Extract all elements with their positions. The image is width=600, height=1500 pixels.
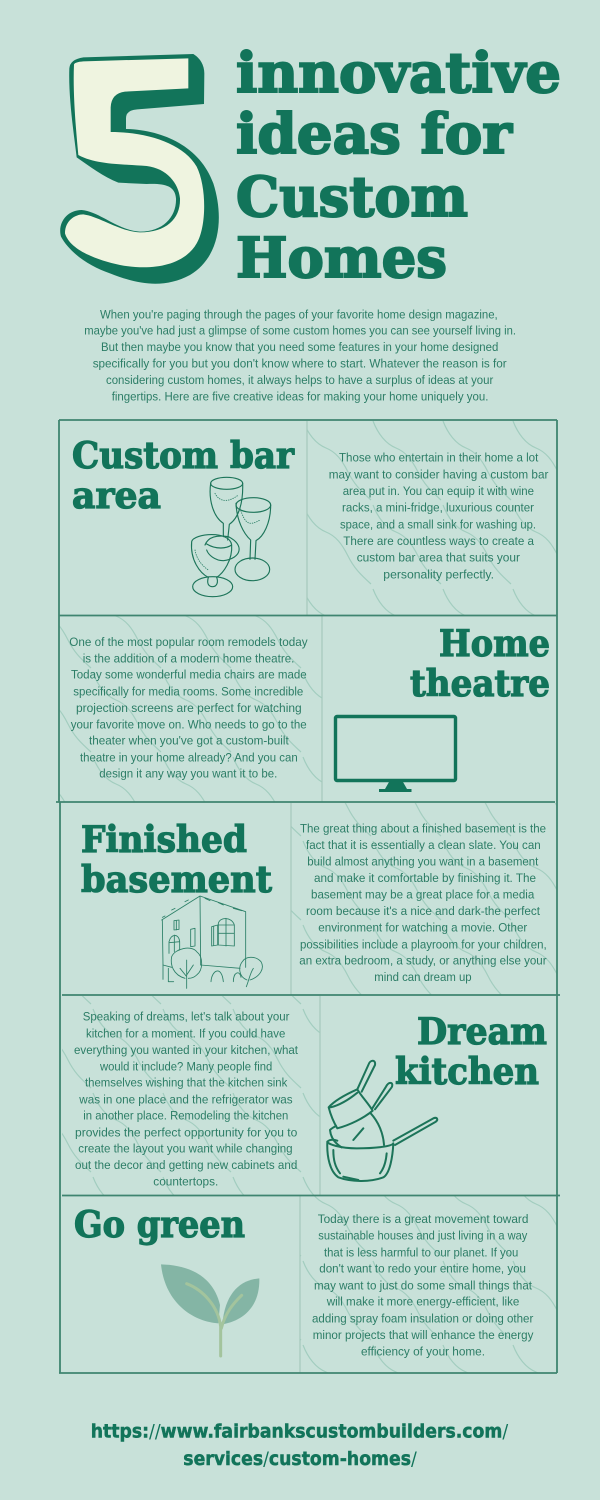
- body text: finished basement: room because it's a nice and dark-the perfect: [306, 904, 541, 918]
- body text: go green: will make it more energy-efficient, like: [326, 1295, 520, 1309]
- icon: television: [336, 716, 456, 792]
- body text: finished basement: mind can dream up: [374, 970, 472, 984]
- body text: finished basement: environment for watching a movie. Other: [318, 921, 527, 935]
- body text: go green: that is less harmful to our planet. If you: [324, 1245, 518, 1259]
- title: Custom: [236, 164, 468, 229]
- panel: go green: [74, 1204, 534, 1358]
- intro text: When you're paging through the pages of your favorite home design magazine,: [100, 307, 498, 321]
- body text: go green: Today there is a great movement toward: [318, 1212, 528, 1226]
- heading: finished basement: [81, 819, 272, 901]
- body text: home theatre: theater when you've got a custom-built: [89, 734, 289, 748]
- body text: dream kitchen: everything you wanted in your kitchen, what: [74, 1043, 299, 1057]
- body text: home theatre: is the addition of a modern home theatre.: [83, 651, 294, 665]
- body text: finished basement: [299, 821, 547, 984]
- panel: custom bar area: [72, 435, 548, 597]
- intro text: fingertips. Here are five creative ideas for making your home uniquely you.: [112, 389, 488, 403]
- heading: custom bar area: Custom bar: [72, 435, 295, 477]
- body text: home theatre: theatre in your home already? And you can: [80, 750, 298, 764]
- body text: custom bar area: Those who entertain in their home a lot: [339, 451, 539, 465]
- intro text: specifically for you but you don't know where to start. Whatever the reason is for: [93, 356, 507, 370]
- body text: finished basement: basement may be a great place for a media: [311, 888, 534, 902]
- body text: dream kitchen: kitchen for a moment. If you could have: [86, 1026, 286, 1040]
- body text: dream kitchen: provides the perfect opportunity for you to: [75, 1125, 298, 1139]
- title: Homes: [236, 225, 447, 290]
- heading: custom bar area: area: [72, 475, 161, 517]
- body text: go green: sustainable houses and just living in a way: [318, 1229, 528, 1243]
- heading: home theatre: theatre: [410, 663, 550, 705]
- body text: dream kitchen: would it include? Many people find: [99, 1059, 272, 1073]
- body text: custom bar area: [329, 451, 548, 581]
- body text: go green: minor projects that will enhance the energy: [313, 1328, 534, 1342]
- body text: home theatre: your favorite move on. Who needs to go to the: [71, 717, 307, 731]
- body text: home theatre: projection screens are perfect for watching: [76, 701, 302, 715]
- intro text: But then maybe you know that you need some features in your home designed: [101, 340, 498, 354]
- body text: finished basement: and make it comfortable by finishing it. The: [314, 871, 536, 885]
- body text: dream kitchen: [74, 1010, 299, 1189]
- heading: dream kitchen: kitchen: [395, 1051, 539, 1093]
- title: ideas for: [236, 101, 513, 166]
- heading: go green: Go green: [74, 1204, 245, 1246]
- big number five: [60, 54, 219, 284]
- body text: finished basement: fact that it is essentially a clean slate. You can: [306, 838, 541, 852]
- body text: go green: adding spray foam insulation or doing other: [312, 1311, 533, 1325]
- body text: finished basement: build almost anything you want in a basement: [307, 855, 539, 869]
- body text: dream kitchen: countertops.: [153, 1175, 218, 1189]
- body text: dream kitchen: was in one place and the refrigerator was: [78, 1092, 293, 1106]
- intro text: considering custom homes, it always helps to have a surplus of ideas at your: [106, 373, 493, 387]
- title: innovative: [236, 40, 561, 105]
- body text: finished basement: The great thing about a finished basement is the: [300, 821, 546, 835]
- body text: dream kitchen: out the decor and getting new cabinets and: [75, 1158, 297, 1172]
- panel: finished basement: [81, 819, 547, 988]
- body text: custom bar area: may want to consider having a custom bar: [329, 467, 548, 481]
- panel: dream kitchen: [74, 1010, 547, 1189]
- heading: home theatre: Home: [439, 623, 550, 665]
- body text: custom bar area: area put in. You can equip it with wine: [343, 484, 534, 498]
- body text: dream kitchen: themselves wishing that the kitchen sink: [85, 1076, 288, 1090]
- footer url: https://www.fairbankscustombuilders.com/: [91, 1420, 509, 1442]
- heading: dream kitchen: [395, 1011, 547, 1093]
- body text: custom bar area: personality perfectly.: [383, 567, 494, 581]
- heading: finished basement: basement: [81, 859, 272, 901]
- body text: home theatre: One of the most popular room remodels today: [69, 635, 308, 649]
- title: [236, 40, 561, 290]
- body text: go green: [312, 1212, 534, 1358]
- icon: plant sprout: [161, 1264, 259, 1356]
- body text: go green: may want to just do some small things that: [314, 1278, 533, 1292]
- icon: house: [162, 896, 262, 988]
- footer url: [91, 1420, 509, 1470]
- heading: custom bar area: [72, 435, 295, 517]
- body text: custom bar area: There are countless ways to create a: [343, 534, 534, 548]
- body text: custom bar area: racks, a mini-fridge, luxurious counter: [342, 501, 534, 515]
- body text: custom bar area: custom bar area that suits your: [357, 551, 520, 565]
- body text: home theatre: [69, 635, 308, 781]
- intro text: maybe you've had just a glimpse of some custom homes you can see yourself living in.: [84, 323, 516, 337]
- panel: home theatre: [69, 623, 550, 792]
- body text: home theatre: design it any way you want it to be.: [99, 767, 277, 781]
- heading: finished basement: Finished: [81, 819, 247, 861]
- body text: finished basement: possibilities include a playroom for your children,: [300, 937, 547, 951]
- heading: home theatre: [410, 623, 550, 705]
- body text: go green: efficiency of your home.: [361, 1344, 485, 1358]
- body text: dream kitchen: in another place. Remodeling the kitchen: [83, 1109, 288, 1123]
- intro text: [84, 307, 516, 403]
- icon: wine glasses: [191, 477, 271, 597]
- body text: dream kitchen: Speaking of dreams, let's talk about your: [83, 1010, 289, 1024]
- body text: go green: don't want to redo your entire home, you: [319, 1262, 526, 1276]
- body text: finished basement: an extra bedroom, a study, or anything else your: [299, 954, 547, 968]
- body text: home theatre: Today some wonderful media chairs are made: [71, 668, 307, 682]
- footer url: services/custom-homes/: [183, 1448, 417, 1470]
- icon: stacked pots: [327, 1061, 437, 1181]
- body text: custom bar area: space, and a small sink for washing up.: [340, 517, 536, 531]
- body text: home theatre: specifically for media rooms. Some incredible: [73, 684, 304, 698]
- heading: dream kitchen: Dream: [417, 1011, 547, 1053]
- body text: dream kitchen: create the layout you want while changing: [78, 1142, 293, 1156]
